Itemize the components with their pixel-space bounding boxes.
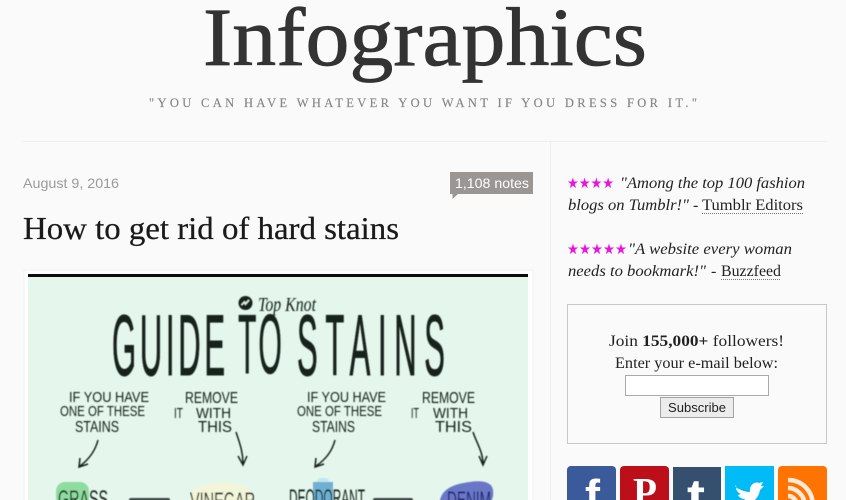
testimonial: tumblr editors: "Among the top 100 fashion (620, 175, 805, 192)
testimonial: buzzfeed: ★★★★★ (567, 242, 627, 258)
followers text: Join 155,000+ followers! (609, 333, 784, 350)
instruction: remove it with this, right (411, 390, 475, 436)
brand name: Top Knot (258, 294, 316, 316)
icon: twitter (725, 466, 774, 500)
instruction: remove it with this, right: WITH (433, 405, 468, 422)
infographic title: TO (238, 298, 282, 392)
stain: denim (440, 481, 493, 500)
arrow 4 (473, 432, 487, 465)
infographic title: STAINS (297, 296, 445, 394)
arrow 3 (315, 440, 335, 467)
testimonial: tumblr editors (567, 175, 805, 214)
testimonial: tumblr editors: ★★★★ (567, 176, 614, 192)
instruction: if you have one of these stains, left: STAINS (75, 419, 119, 436)
notes badge (450, 172, 533, 199)
instruction: if you have one of these stains, right: ONE OF THESE (297, 403, 382, 420)
arrow 1 (79, 440, 98, 467)
instruction: if you have one of these stains, left: IF YOU HAVE (69, 389, 149, 406)
instruction: remove it with this, right: REMOVE (422, 390, 475, 407)
testimonial: tumblr editors: blogs on Tumblr!" (568, 197, 689, 214)
instruction: remove it with this, right: THIS (435, 419, 472, 436)
testimonial: buzzfeed: "A website every woman (628, 241, 792, 258)
instruction: if you have one of these stains, left: ONE OF THESE (60, 403, 145, 420)
infographic image: guide to stains (24, 270, 533, 500)
testimonial: tumblr editors: Tumblr Editors (702, 197, 803, 214)
subscribe button (660, 398, 734, 418)
email prompt: Enter your e-mail below: (615, 355, 778, 372)
icon: top knot logo (238, 296, 252, 310)
infographic title (112, 313, 444, 378)
post heading: How to get rid of hard stains (23, 211, 399, 246)
icon: rss (778, 466, 827, 500)
subscribe button: Subscribe (668, 400, 726, 415)
remover: vinegar (190, 483, 255, 500)
remover bottle top, left (129, 498, 170, 500)
testimonial: buzzfeed (567, 241, 792, 280)
instruction: if you have one of these stains, right: STAINS (312, 419, 355, 436)
infographic title: GUIDE (112, 296, 225, 394)
instruction: if you have one of these stains, left (60, 389, 149, 436)
icon: facebook (567, 466, 616, 500)
panel: subscribe box (568, 304, 826, 444)
post date: August 9, 2016 (23, 175, 119, 191)
tagline: "YOU CAN HAVE WHATEVER YOU WANT IF YOU DRESS FOR IT." (149, 96, 697, 110)
instruction: remove it with this, left (174, 390, 238, 436)
instruction: remove it with this, right: IT (411, 405, 419, 422)
instruction: remove it with this, left: WITH (196, 405, 231, 422)
instruction: if you have one of these stains, right (297, 389, 386, 436)
instruction: remove it with this, left: IT (174, 405, 183, 422)
email input (626, 376, 768, 396)
stain: grass (56, 482, 108, 500)
icon: pinterest (620, 466, 669, 500)
stain: deodorant (289, 478, 365, 500)
notes badge: 1,108 notes (455, 175, 529, 191)
testimonial: buzzfeed: needs to bookmark!" (568, 263, 706, 280)
instruction: remove it with this, left: THIS (198, 419, 232, 436)
instruction: if you have one of these stains, right: IF YOU HAVE (307, 389, 386, 406)
testimonial: buzzfeed: - (711, 263, 716, 280)
arrow 2 (236, 432, 247, 465)
remover bottle top, right (373, 498, 413, 500)
testimonial: tumblr editors: - (693, 197, 698, 214)
icon: tumblr (673, 467, 721, 500)
instruction: remove it with this, left: REMOVE (185, 390, 238, 407)
testimonial: buzzfeed: Buzzfeed (721, 263, 781, 280)
